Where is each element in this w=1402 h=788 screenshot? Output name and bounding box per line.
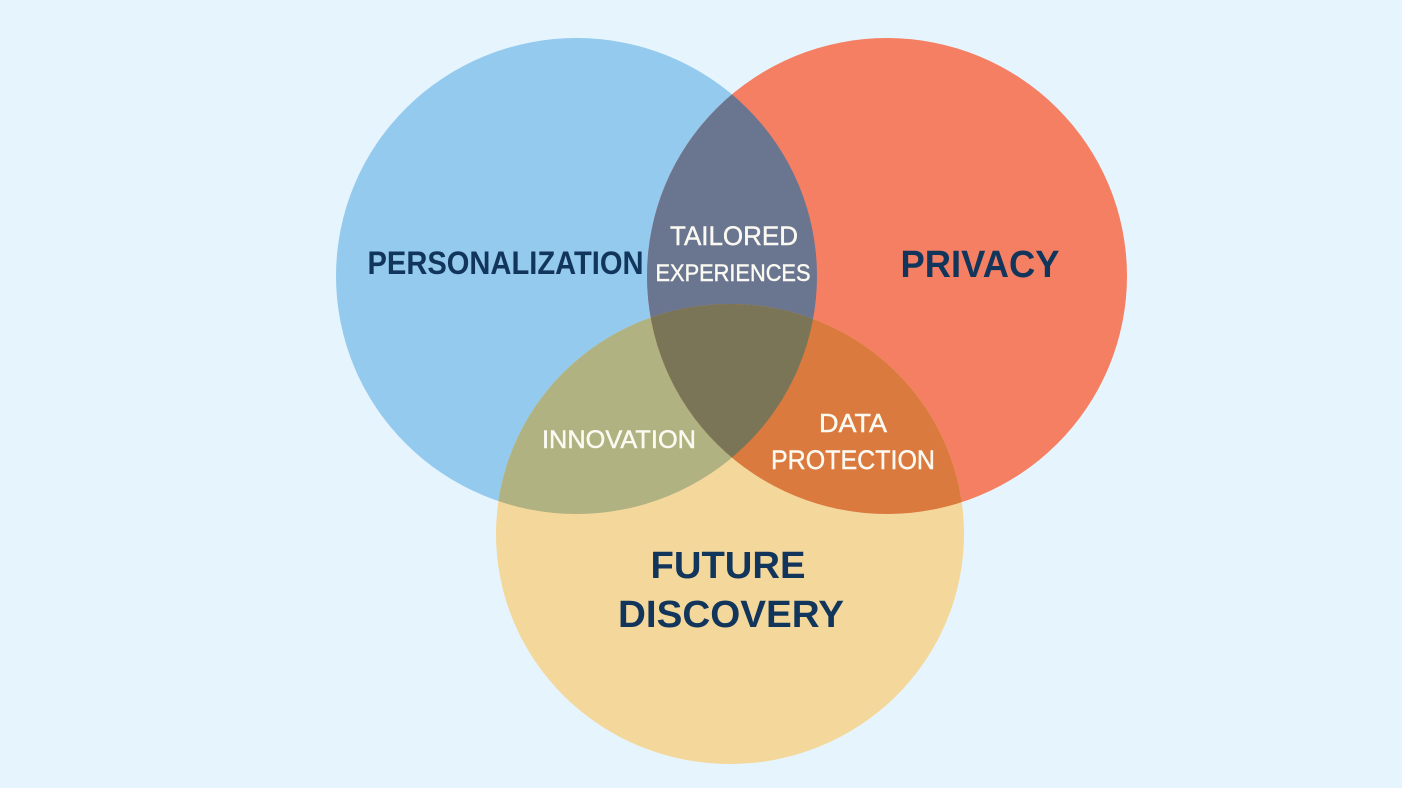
label: future discovery: FUTURE xyxy=(650,545,806,587)
label: tailored experiences: EXPERIENCES xyxy=(656,260,810,287)
label: privacy: PRIVACY xyxy=(900,244,1060,286)
label: tailored experiences: TAILORED xyxy=(670,221,798,251)
overlap: all three circles xyxy=(650,304,813,458)
label: personalization: PERSONALIZATION xyxy=(368,245,644,281)
label: data protection: DATA xyxy=(819,408,888,438)
venn diagram xyxy=(336,38,1127,764)
label: data protection xyxy=(771,408,935,475)
circle: personalization xyxy=(336,38,817,514)
circle: privacy xyxy=(647,38,1127,514)
label: innovation: INNOVATION xyxy=(542,426,696,454)
label: tailored experiences xyxy=(656,221,810,287)
label: future discovery xyxy=(618,545,844,636)
label: future discovery: DISCOVERY xyxy=(618,594,844,636)
overlap: personalization and future discovery xyxy=(498,304,812,514)
overlap: personalization and privacy xyxy=(647,94,817,319)
label: data protection: PROTECTION xyxy=(771,445,935,475)
overlap: privacy and future discovery xyxy=(650,304,962,514)
circle: future discovery xyxy=(496,304,964,764)
